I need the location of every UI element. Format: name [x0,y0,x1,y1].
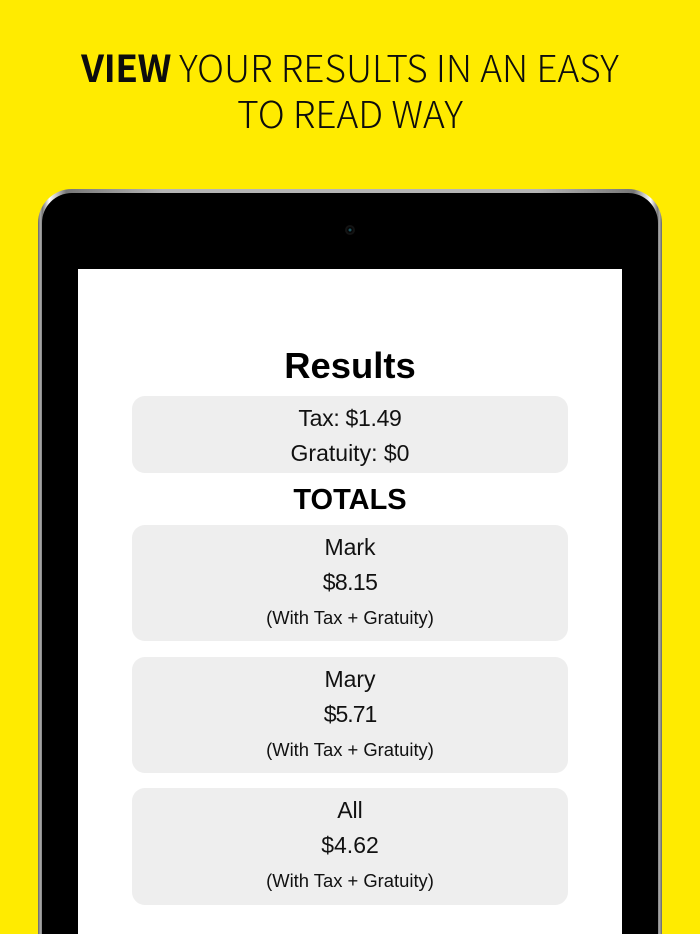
text: Mark total: $8.15 [323,569,377,595]
text: gratuity: Gratuity: $0 [291,440,409,466]
text: Mary note: (With Tax + Gratuity) [266,739,434,760]
text: Mary total: $5.71 [324,701,376,727]
headline: TO READ WAY [237,85,463,139]
text: All total: $4.62 [321,832,379,858]
text: Mark note: (With Tax + Gratuity) [266,607,434,628]
headline: VIEW YOUR RESULTS IN AN EASY [81,39,619,93]
panel: tax and gratuity [132,396,568,473]
panel: Mark [132,525,568,641]
text: All note: (With Tax + Gratuity) [266,870,434,891]
text: All name: All [337,797,363,823]
panel: All [132,788,568,905]
text: tax: Tax: $1.49 [298,405,402,431]
headline [81,39,619,139]
heading: results: Results [284,345,416,386]
text: Mary name: Mary [324,666,376,692]
panel: Mary [132,657,568,773]
text: Mark name: Mark [324,534,376,560]
heading: totals: TOTALS [293,484,407,516]
